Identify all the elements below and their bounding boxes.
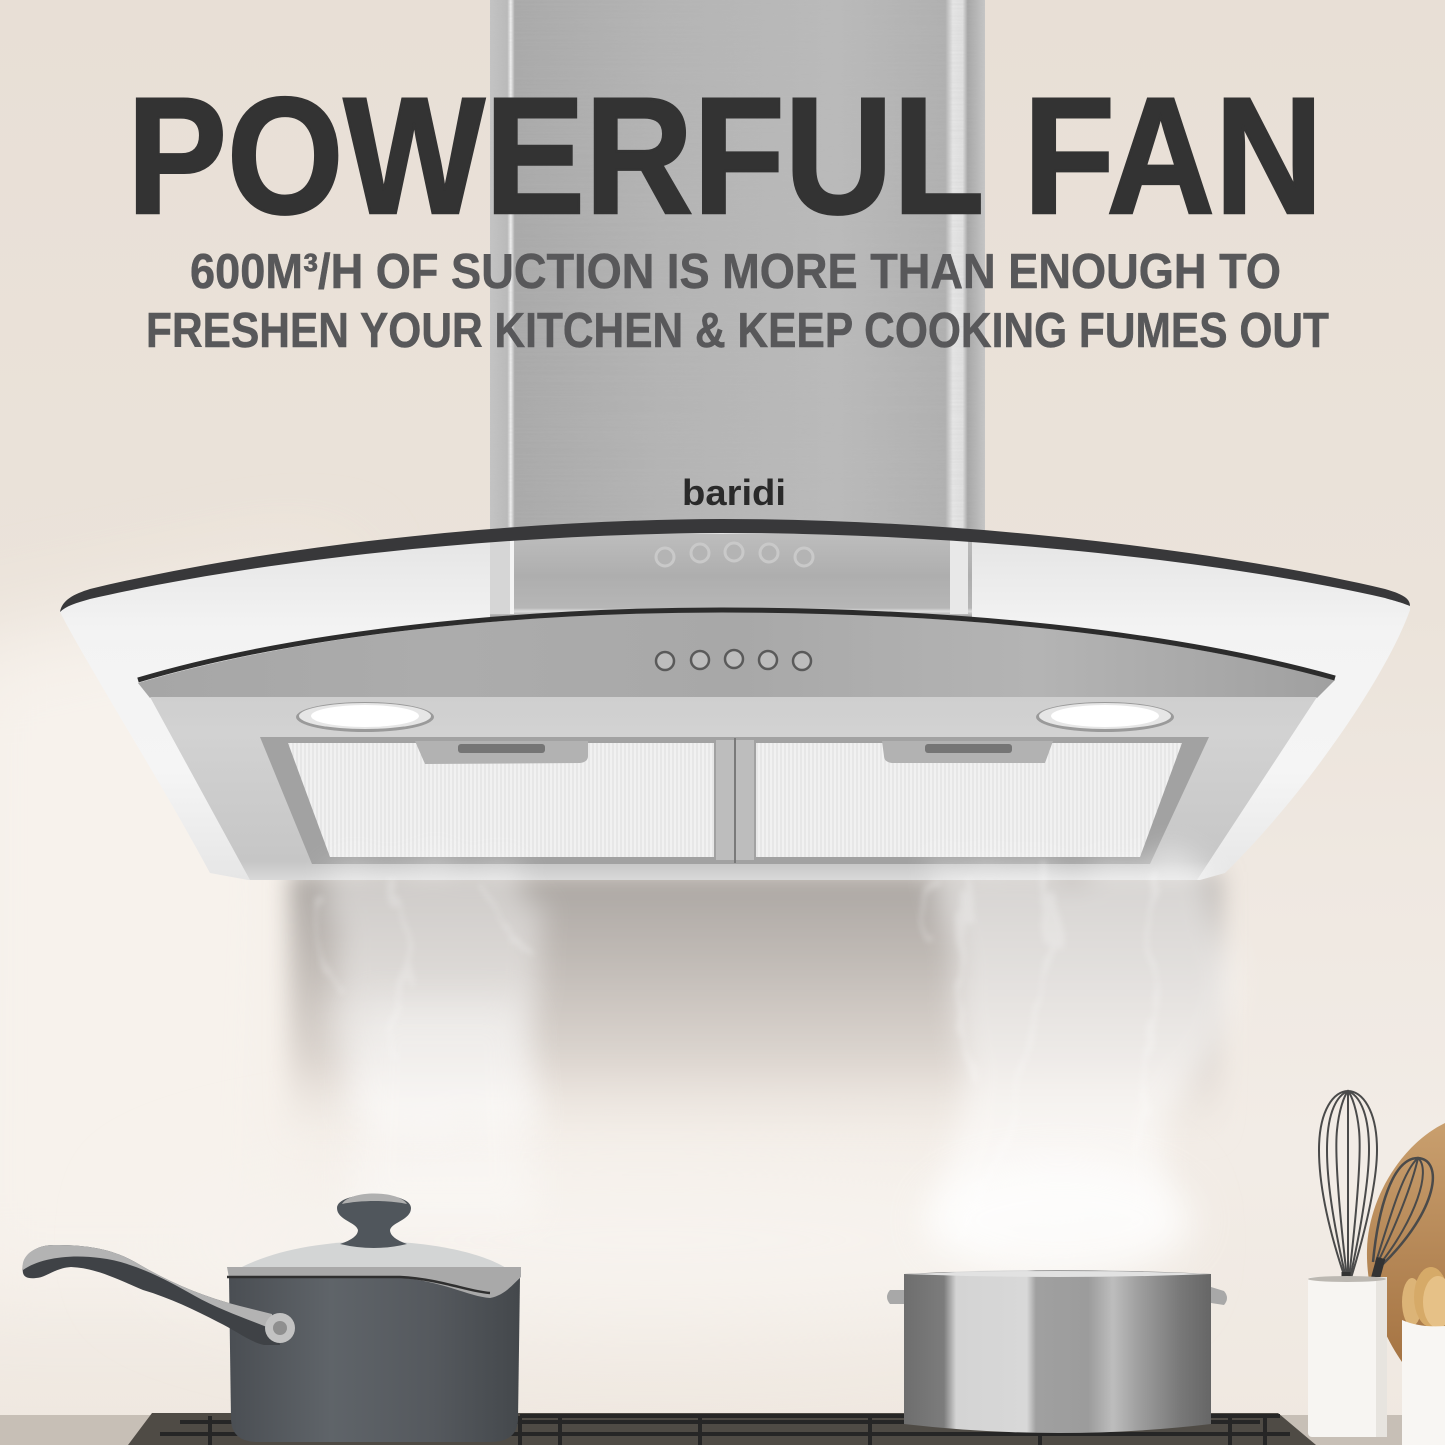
knob [337,1194,411,1248]
steam: right [914,865,1230,1280]
filter frame [260,737,1209,864]
left filter handle [415,741,588,764]
brand logo: baridi [682,472,786,513]
steel front panel [138,612,1335,698]
counter and stove top [0,1413,1445,1445]
subtitle [146,245,1329,358]
right filter handle [882,741,1053,763]
control buttons [656,650,811,670]
panel dark rim [138,610,1335,680]
steam: left [310,865,535,1220]
wooden spoons and second holder [1402,1267,1445,1445]
subtitle: 600M³/H OF SUCTION IS MORE THAN ENOUGH TO [190,245,1281,299]
lid rim and spout [227,1267,521,1298]
title: POWERFUL FAN [127,64,1323,249]
shadow under hood [290,872,1220,1142]
left light [296,702,434,732]
glass canopy [60,520,1410,880]
right light [1036,702,1174,732]
hood underside [150,697,1317,880]
side handles [887,1287,1227,1305]
ghost button reflections [656,543,813,566]
pan body [229,1277,520,1442]
dark glass top edge [60,519,1410,612]
right grease filter [756,743,1182,857]
wooden board [1367,1123,1445,1385]
range hood [60,519,1410,880]
chimney duct [490,0,985,535]
chimney reflection in glass [490,534,972,618]
left saucepan with glass lid [23,1194,521,1442]
right stock pot [887,1270,1227,1433]
lid dome [240,1241,506,1268]
utensil holder [1308,1276,1387,1437]
handle [23,1245,295,1345]
whisks [1319,1091,1433,1280]
left grease filter [288,743,714,857]
